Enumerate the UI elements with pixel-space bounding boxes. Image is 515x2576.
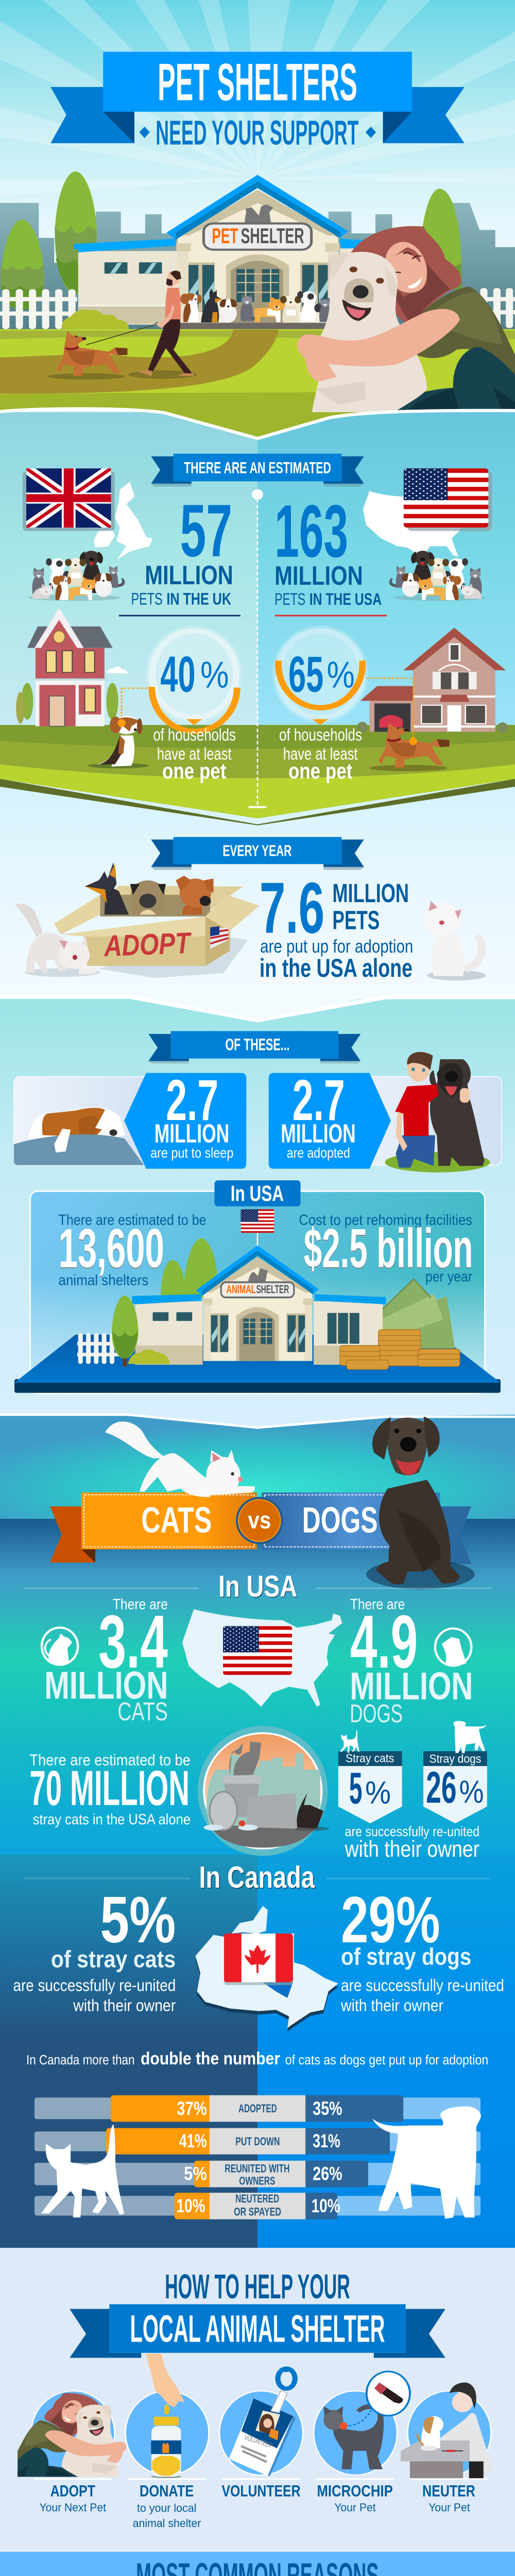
ribbon: cats	[50, 1493, 257, 1563]
item: adopt	[18, 2391, 127, 2514]
ring chart: 40%: 40	[160, 646, 195, 703]
stat: stray cats: are successfully re-united	[13, 1976, 176, 1994]
tab: in USA: In USA	[231, 1181, 284, 1206]
stat: 57 million: MILLION	[145, 561, 233, 590]
ribbon: every year: EVERY YEAR	[222, 842, 291, 860]
porch	[177, 323, 329, 330]
sign: animal shelter: ANIMAL	[226, 1283, 256, 1296]
stat: put to sleep: MILLION	[154, 1119, 229, 1148]
ribbon: of these: OF THESE...	[226, 1035, 290, 1054]
shelter building	[196, 1245, 319, 1361]
stat: 57 million: PETS	[131, 589, 163, 608]
white cat left	[15, 904, 100, 977]
panel: put to sleep	[14, 1077, 178, 1165]
sign: animal shelter	[221, 1268, 294, 1297]
row: neutered	[35, 2193, 480, 2219]
stat: stray cats: 5%	[100, 1883, 176, 1956]
panel: every year and of these	[0, 837, 515, 1394]
adoption box with dogs	[54, 862, 260, 978]
stat: 57 million: 57	[180, 489, 232, 572]
stat: 7.6 million pets: 7.6	[260, 868, 324, 948]
panel: hero	[0, 0, 515, 447]
item: adopt: Your Next Pet	[40, 2501, 106, 2514]
stat: 7.6 million pets: PETS	[332, 906, 380, 935]
stat: cats: There are	[113, 1597, 168, 1613]
stat: 163 million: IN THE USA	[310, 590, 382, 608]
silhouette: dog	[372, 2107, 481, 2219]
stat: 7.6 million pets	[260, 868, 413, 983]
item: donate: to your local	[137, 2502, 196, 2515]
icon: dog	[435, 1629, 471, 1666]
ribbon: of these	[148, 1031, 360, 1063]
text: reunited: are successfully re-united	[345, 1824, 479, 1839]
row: reunited	[35, 2161, 480, 2188]
hero edge	[0, 409, 515, 438]
pets group left	[28, 551, 125, 601]
ring chart: 40%: %	[200, 654, 229, 696]
bush	[62, 310, 129, 329]
flag: USA	[404, 468, 492, 531]
flag: USA	[223, 1626, 292, 1675]
skyline	[0, 203, 515, 331]
stat: put to sleep: 2.7	[166, 1067, 218, 1132]
house: USA	[357, 628, 508, 733]
grass	[0, 329, 515, 447]
ring chart: 40%	[146, 625, 242, 731]
text: $2.5 billion	[299, 1211, 473, 1285]
map: USA	[363, 491, 460, 557]
dog: doberman	[85, 862, 129, 914]
stray dogs card: %	[459, 1774, 484, 1809]
stat: stray cats: of stray cats	[51, 1946, 176, 1973]
chevron	[131, 994, 383, 1020]
bar chart	[35, 2095, 480, 2219]
right wing	[339, 239, 364, 253]
ribbon: dogs	[262, 1493, 471, 1564]
coins	[340, 1330, 460, 1369]
shelter wings	[132, 1294, 386, 1365]
text: reunited	[345, 1824, 479, 1862]
stat: 163 million	[274, 489, 387, 616]
ring chart: 65%: 65	[288, 646, 323, 703]
text: of households 40	[153, 726, 236, 784]
text: double the number: double the number	[141, 2048, 280, 2069]
badge: vs	[236, 1497, 283, 1544]
item: neuter	[401, 2382, 493, 2514]
platform	[14, 1335, 501, 1393]
stat: 7.6 million pets: in the USA alone	[260, 954, 413, 983]
left wing	[74, 239, 178, 325]
text: double the number: In Canada more than	[26, 2053, 134, 2067]
tree	[1, 219, 44, 310]
tree	[420, 189, 461, 289]
stat: stray cats: with their owner	[73, 1996, 176, 2015]
shelter building	[166, 175, 348, 324]
stat: cats: MILLION	[44, 1664, 168, 1707]
stat: 163 million: 163	[274, 489, 348, 573]
panel: pets by country	[0, 454, 515, 825]
map: USA	[182, 1609, 342, 1707]
dog	[369, 722, 449, 771]
text: 70 million: stray cats in the USA alone	[33, 1811, 191, 1828]
stray cats card: %	[365, 1775, 391, 1810]
item: microchip	[314, 2371, 410, 2514]
section divider	[0, 1409, 515, 1427]
stray cats card: 5	[349, 1764, 362, 1814]
row: put down: 41%	[179, 2130, 207, 2151]
white cat	[105, 1421, 255, 1497]
bush	[128, 1349, 170, 1364]
connector: 65%	[366, 678, 413, 739]
flag: Canada	[224, 1934, 293, 1985]
row: put down: 31%	[313, 2130, 340, 2151]
text: 70 million	[29, 1751, 191, 1828]
text: 13,600 shelters: 13,600	[59, 1217, 164, 1279]
stat: adopted: are adopted	[287, 1145, 350, 1161]
sign: pet shelter	[203, 224, 312, 250]
silhouette: cat	[41, 2124, 124, 2217]
item: microchip: MICROCHIP	[317, 2482, 393, 2500]
title ribbon	[50, 52, 465, 143]
adoption box with dogs: ADOPT	[102, 926, 193, 963]
item: donate: DONATE	[140, 2482, 194, 2500]
panel: adopted	[338, 1077, 502, 1165]
fence	[77, 1333, 122, 1364]
stat: dogs: There are	[350, 1597, 405, 1613]
stat: put to sleep	[124, 1067, 246, 1169]
ribbon: dogs: DOGS	[302, 1499, 377, 1540]
heading: in Canada: In Canada	[199, 1860, 315, 1894]
stray dogs card: 26	[426, 1763, 456, 1812]
stat: 57 million: IN THE UK	[166, 589, 231, 608]
white cat right	[423, 901, 486, 980]
ribbon: every year	[151, 837, 364, 870]
stray cats card	[338, 1730, 402, 1823]
stat: 163 million: MILLION	[274, 561, 363, 591]
text: of households 65: of households	[279, 726, 362, 745]
text: 70 million: There are estimated to be	[29, 1751, 191, 1769]
sign: animal shelter: SHELTER	[256, 1283, 289, 1296]
trees	[161, 1238, 218, 1298]
text: 70 million: 70 MILLION	[29, 1760, 190, 1816]
item: volunteer: VOLUNTEER	[243, 2434, 274, 2450]
map: Canada	[195, 1906, 338, 2031]
item: neuter: Your Pet	[428, 2501, 470, 2514]
leash	[86, 322, 158, 345]
panel: in Canada	[13, 1860, 504, 2219]
text: double the number	[26, 2048, 488, 2069]
stat: adopted	[269, 1067, 391, 1169]
item: donate: animal shelter	[133, 2517, 201, 2530]
dog: terrier	[176, 876, 214, 914]
text: of households 65	[279, 726, 362, 784]
dog on leash	[47, 331, 127, 380]
icon: cat	[42, 1628, 78, 1665]
stat: cats: CATS	[117, 1697, 168, 1726]
row: adopted	[35, 2095, 480, 2122]
heading: in USA: In USA	[218, 1570, 297, 1603]
beagle	[88, 716, 148, 768]
row: neutered: OR SPAYED	[234, 2206, 281, 2218]
tree	[112, 1295, 138, 1366]
black dog	[366, 1416, 475, 1589]
row: adopted: 35%	[313, 2098, 342, 2119]
flag: UK	[23, 468, 115, 531]
panel: in USA	[30, 1191, 485, 1394]
stat: put to sleep: are put to sleep	[150, 1145, 233, 1161]
ribbon: cats: CATS	[141, 1499, 212, 1540]
ring chart: 65%	[272, 625, 368, 725]
badge: vs: vs	[248, 1507, 271, 1534]
pets row	[180, 289, 338, 323]
item: microchip: Your Pet	[334, 2501, 376, 2514]
row: reunited: 5%	[184, 2163, 207, 2184]
text: of households 40: have at least	[157, 744, 232, 764]
row: neutered: NEUTERED	[235, 2193, 279, 2205]
item: adopt: ADOPT	[50, 2482, 95, 2500]
stat: 7.6 million pets: MILLION	[332, 879, 409, 908]
panel: how to help	[18, 2268, 493, 2576]
row: adopted: ADOPTED	[238, 2103, 277, 2115]
stat: cats	[44, 1597, 168, 1726]
illustration: stray cats	[198, 1726, 329, 1856]
stat: stray dogs	[340, 1883, 504, 2015]
row: put down	[35, 2128, 480, 2155]
section divider	[0, 996, 515, 1020]
stray dogs card: Stray dogs	[430, 1753, 481, 1766]
row: neutered: 10%	[176, 2195, 205, 2216]
stat: 57 million	[119, 489, 241, 616]
item: neuter: NEUTER	[422, 2482, 475, 2500]
row: adopted: 37%	[177, 2098, 207, 2119]
row: reunited: 26%	[313, 2163, 342, 2184]
row: put down: PUT DOWN	[235, 2135, 280, 2148]
map: UK	[94, 482, 153, 560]
stat: 7.6 million pets: are put up for adoption	[260, 936, 413, 957]
stat: dogs: DOGS	[350, 1699, 403, 1728]
stat: adopted: 2.7	[293, 1067, 345, 1132]
panel: cats vs dogs	[0, 1409, 515, 1862]
stat: cats: 3.4	[98, 1599, 168, 1684]
stat: stray dogs: with their owner	[340, 1996, 443, 2015]
item: volunteer	[219, 2367, 303, 2500]
row: reunited: OWNERS	[239, 2175, 275, 2188]
house: UK	[16, 608, 127, 726]
money	[381, 1279, 455, 1348]
marker	[409, 737, 417, 745]
stat: 163 million: PETS	[274, 590, 305, 608]
pets group right	[389, 551, 486, 601]
sign: pet shelter: PET	[212, 224, 238, 248]
row: reunited: REUNITED WITH	[225, 2162, 290, 2175]
text: of households 65: one pet	[288, 759, 352, 784]
item: volunteer: VOLUNTEER	[221, 2482, 301, 2500]
connector: 40%	[122, 688, 152, 721]
boy with dog	[385, 1052, 490, 1173]
ribbon: local animal shelter	[70, 2304, 445, 2358]
divider line	[249, 489, 266, 808]
stat: adopted: MILLION	[281, 1119, 356, 1148]
text: of households 40: one pet	[162, 759, 226, 784]
ribbon: there are an estimated: THERE ARE AN ESTIMATED	[184, 459, 331, 477]
edge	[0, 1415, 515, 1428]
text: of households 65: have at least	[283, 744, 358, 764]
sign: pet shelter: SHELTER	[241, 224, 304, 248]
ribbon: there are an estimated	[151, 454, 364, 486]
dog: pug	[130, 880, 166, 914]
stat: dogs	[350, 1597, 473, 1728]
stray dogs card	[423, 1721, 487, 1823]
text: of households 40: of households	[153, 726, 236, 745]
text: $2.5 billion: per year	[425, 1268, 472, 1285]
stray cats card: Stray cats	[346, 1752, 394, 1765]
text: 13,600 shelters: animal shelters	[59, 1272, 148, 1289]
stat: dogs: 4.9	[350, 1599, 418, 1684]
ground	[0, 725, 515, 825]
flag on pole	[241, 1209, 274, 1247]
stat: stray cats	[13, 1883, 176, 2015]
heading: need your support	[139, 114, 376, 152]
pet silhouette	[245, 205, 273, 223]
row: neutered: 10%	[312, 2195, 340, 2216]
text: 13,600 shelters: There are estimated to be	[59, 1211, 207, 1228]
sleeping dog	[28, 1107, 126, 1139]
item: donate	[126, 2353, 209, 2530]
text: $2.5 billion: Cost to pet rehoming facilities	[299, 1211, 472, 1228]
tree	[55, 172, 97, 294]
picket fence	[0, 288, 515, 329]
woman hugging dog	[297, 226, 515, 412]
ring chart: 65%: %	[327, 654, 355, 696]
man walking	[128, 270, 197, 379]
stat: stray dogs: 29%	[341, 1883, 440, 1956]
